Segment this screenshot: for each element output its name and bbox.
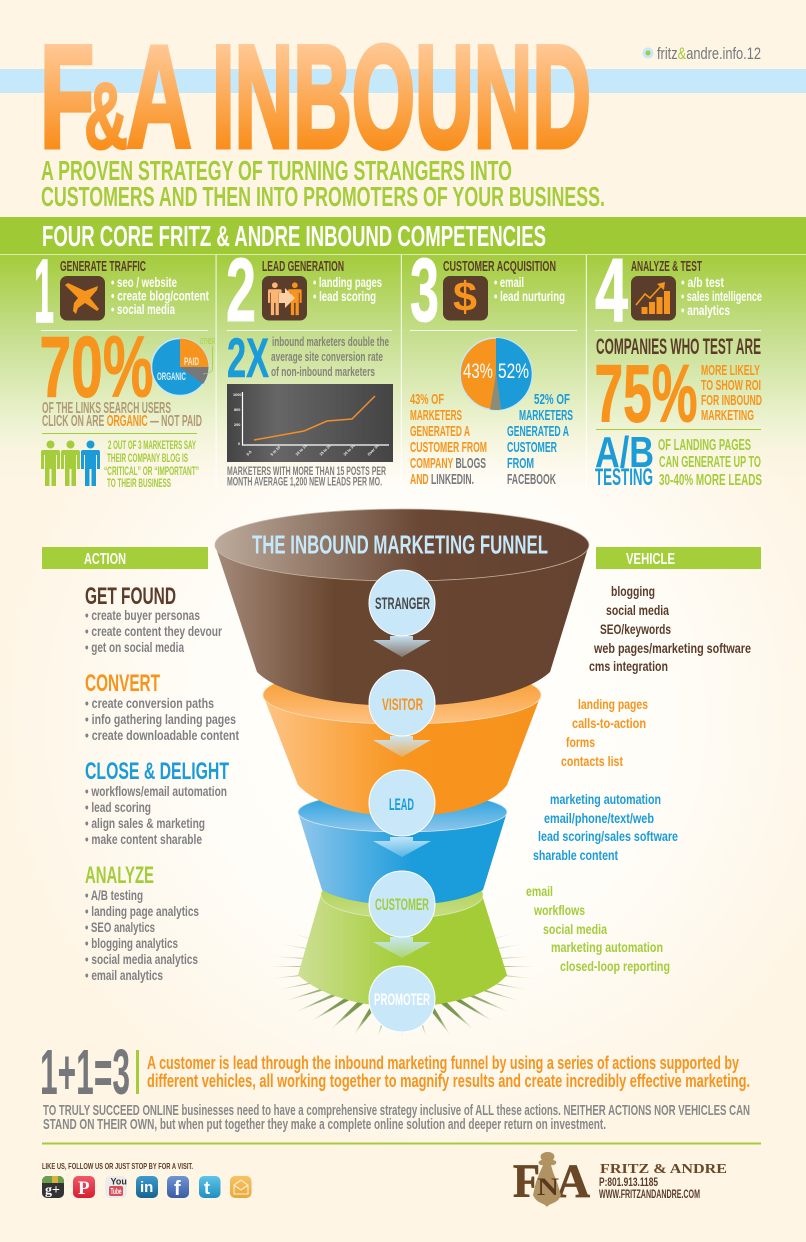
pie chart: PAID xyxy=(184,356,199,368)
action: analyze: • email analytics xyxy=(85,967,163,983)
stat text: FOR INBOUND xyxy=(701,392,762,409)
vehicles: customer: marketing automation xyxy=(551,939,663,955)
contact details: WWW.FRITZANDANDRE.COM xyxy=(599,1189,700,1201)
icon: people xyxy=(41,440,100,486)
stage: lead xyxy=(369,770,435,836)
A/B testing: TESTING xyxy=(595,464,653,491)
action: close and delight: • align sales & marketing xyxy=(85,815,205,831)
line chart xyxy=(227,384,393,462)
text: 43%: 43% OF xyxy=(410,391,444,408)
list: • lead scoring xyxy=(313,288,376,304)
caption: OF THE LINKS SEARCH USERS xyxy=(42,400,171,417)
list: • sales intelligence xyxy=(681,288,762,304)
icon: pinterest xyxy=(73,1176,95,1199)
icon: facebook: f xyxy=(174,1178,181,1200)
list xyxy=(681,274,762,318)
text: 52%: FACEBOOK xyxy=(507,471,556,488)
chart caption: MONTH AVERAGE 1,200 NEW LEADS PER MO. xyxy=(227,476,382,488)
list: • a/b test xyxy=(681,274,724,290)
sunburst behind funnel xyxy=(263,921,541,1040)
action: convert: • create downloadable content xyxy=(85,727,239,743)
icon: mail xyxy=(230,1176,252,1198)
icon: growth chart xyxy=(631,276,676,320)
infographic: 1+1=3 xyxy=(40,1036,130,1108)
number 2: 2 xyxy=(226,241,256,341)
vehicles: stranger: blogging xyxy=(611,583,655,599)
arrow: stranger to visitor xyxy=(373,636,431,657)
contact details: P:801.913.1185 xyxy=(599,1177,658,1189)
blog stat: TO THEIR BUSINESS xyxy=(107,478,171,490)
blog stat: “CRITICAL” OR “IMPORTANT” xyxy=(104,466,199,478)
heading: GENERATE TRAFFIC xyxy=(60,259,146,275)
subtitle xyxy=(41,155,605,212)
logo xyxy=(513,1152,590,1208)
panel: 3 customer acquisition xyxy=(410,241,577,488)
vehicles: stranger: web pages/marketing software xyxy=(593,640,751,656)
contact details xyxy=(599,1162,727,1201)
arrow: visitor to lead xyxy=(373,736,431,757)
logo: N xyxy=(537,1174,559,1201)
subtitle: A PROVEN STRATEGY OF TURNING STRANGERS INTO xyxy=(41,155,512,186)
icon: dollar: $ xyxy=(453,273,477,320)
vehicles: lead: email/phone/text/web xyxy=(544,810,654,826)
caption xyxy=(42,400,202,430)
vehicles: visitor: landing pages xyxy=(578,696,648,712)
list: • landing pages xyxy=(313,274,382,290)
blog stat: THEIR COMPANY BLOG IS xyxy=(107,453,188,465)
A/B testing xyxy=(595,428,654,491)
action: get found xyxy=(85,583,222,655)
icon: pinterest: P xyxy=(78,1178,90,1199)
text: 52%: CUSTOMER xyxy=(507,439,557,456)
panel: 4 analyze and test xyxy=(594,241,762,491)
vehicles: customer xyxy=(526,883,670,974)
vehicles: lead xyxy=(533,791,678,863)
vehicles list xyxy=(526,583,751,974)
vehicles: customer: social media xyxy=(543,921,607,937)
heading: LEAD GENERATION xyxy=(262,259,344,275)
funnel: blue section xyxy=(298,792,507,905)
text: 52%: GENERATED A xyxy=(507,423,569,440)
heading: CUSTOMER ACQUISITION xyxy=(443,259,556,275)
arrow: lead to customer xyxy=(373,837,431,857)
stat text: MORE LIKELY xyxy=(701,362,760,379)
stat 75%: 75% xyxy=(594,348,698,440)
title xyxy=(40,15,591,178)
action: close and delight xyxy=(85,758,229,847)
summary text xyxy=(147,1053,750,1091)
vehicle bar: VEHICLE xyxy=(626,551,675,568)
stat 2X: 2X xyxy=(227,326,269,389)
action: analyze: ANALYZE xyxy=(85,862,154,889)
vehicles: visitor: contacts list xyxy=(561,753,623,769)
list xyxy=(313,274,382,304)
stat text: of non-inbound marketers xyxy=(271,364,375,379)
logo: F xyxy=(513,1155,540,1208)
action: convert: • info gathering landing pages xyxy=(85,711,236,727)
stat text: inbound marketers double the xyxy=(272,334,389,349)
title: & xyxy=(84,64,128,170)
icon: youtube xyxy=(105,1176,127,1198)
panel: 2 lead generation xyxy=(226,241,393,488)
action bar xyxy=(42,547,208,569)
funnel: orange section xyxy=(263,666,541,816)
arrow: customer to promoter xyxy=(373,937,431,958)
icon: twitter: t xyxy=(204,1178,210,1198)
action: convert: • create conversion paths xyxy=(85,695,214,711)
pie chart: OTHER xyxy=(200,337,215,346)
vehicles: lead: lead scoring/sales software xyxy=(538,828,678,844)
icon: google plus: g+ xyxy=(45,1183,60,1198)
stat text xyxy=(701,362,762,424)
stage: customer: CUSTOMER xyxy=(375,895,429,914)
line chart: 5 to 10 xyxy=(270,445,281,457)
contact details: FRITZ & ANDRE xyxy=(600,1162,727,1177)
number 3: 3 xyxy=(410,241,439,341)
vehicles: visitor: forms xyxy=(566,734,595,750)
action: close and delight: • make content sharable xyxy=(85,831,202,847)
line chart: 0 xyxy=(238,442,240,446)
icon: facebook xyxy=(167,1176,189,1200)
text: 43%: CUSTOMER FROM xyxy=(410,439,487,456)
action: analyze: • A/B testing xyxy=(85,887,143,903)
icon: youtube: Tube xyxy=(110,1187,122,1196)
stage: lead: LEAD xyxy=(389,795,414,814)
list xyxy=(494,274,565,304)
pie chart: 52% xyxy=(498,360,529,383)
action: convert: CONVERT xyxy=(85,670,160,697)
vehicles: customer: workflows xyxy=(533,902,585,918)
heading: ANALYZE & TEST xyxy=(631,259,702,275)
icon: dollar xyxy=(443,273,488,320)
stat 70%: 70% xyxy=(40,320,154,416)
icon: youtube: You xyxy=(110,1176,127,1186)
action: analyze: • landing page analytics xyxy=(85,903,199,919)
list xyxy=(111,275,209,317)
text: 43%: COMPANY BLOGS xyxy=(410,455,486,472)
action: get found: GET FOUND xyxy=(85,583,176,610)
text: 52%: FROM xyxy=(507,455,534,472)
action: analyze: • SEO analytics xyxy=(85,919,155,935)
line chart: 200 xyxy=(234,423,240,427)
vehicles: visitor: calls-to-action xyxy=(572,715,646,731)
site tag: fritz&andre.info.12 xyxy=(657,44,761,63)
action: close and delight: CLOSE & DELIGHT xyxy=(85,758,229,785)
stat text: TO SHOW ROI xyxy=(701,377,761,394)
vehicles: stranger: cms integration xyxy=(589,658,668,674)
vehicles: stranger: SEO/keywords xyxy=(600,621,671,637)
stage: visitor: VISITOR xyxy=(382,695,423,714)
blog stat: 2 OUT OF 3 MARKETERS SAY xyxy=(108,440,196,452)
line chart: 20 to 30 xyxy=(343,444,356,457)
stage: customer xyxy=(369,871,435,937)
icon: plane xyxy=(60,276,105,320)
line chart: 10 to 15 xyxy=(295,444,308,457)
social prompt: LIKE US, FOLLOW US OR JUST STOP BY FOR A VISIT. xyxy=(42,1161,193,1171)
vehicles: stranger xyxy=(589,583,751,674)
panel: 1 generate traffic xyxy=(34,242,215,490)
caption: CLICK ON ARE ORGANIC — NOT PAID xyxy=(42,413,202,430)
list: • email xyxy=(494,274,524,290)
stage: stranger: STRANGER xyxy=(375,594,430,613)
action: close and delight: • lead scoring xyxy=(85,799,151,815)
panel: competencies background xyxy=(0,254,806,490)
A/B testing: A/B xyxy=(595,428,654,477)
text: 52%: 52% OF xyxy=(534,391,570,408)
title: A xyxy=(126,15,192,178)
body text xyxy=(43,1102,750,1133)
funnel xyxy=(215,509,589,1032)
icon: google plus xyxy=(42,1176,64,1198)
action: get found: • create content they devour xyxy=(85,623,222,639)
text: 43% xyxy=(410,391,487,488)
funnel: brown section xyxy=(215,509,589,706)
vehicles: lead: marketing automation xyxy=(550,791,661,807)
list: • seo / website xyxy=(111,275,177,290)
action bar: ACTION xyxy=(84,551,126,568)
number 4: 4 xyxy=(595,241,628,341)
vehicles: customer: closed-loop reporting xyxy=(560,958,670,974)
social icons xyxy=(42,1176,252,1200)
line chart: 1000 xyxy=(233,393,241,397)
action: convert xyxy=(85,670,239,743)
A/B text xyxy=(658,437,762,489)
text: 43%: GENERATED A xyxy=(410,423,470,440)
light blue stripe xyxy=(0,69,806,93)
action: analyze: • social media analytics xyxy=(85,951,198,967)
chart caption: MARKETERS WITH MORE THAN 15 POSTS PER xyxy=(227,466,386,478)
vehicles: lead: sharable content xyxy=(533,847,618,863)
pie chart: ORGANIC xyxy=(157,371,186,383)
panel: 1 generate traffic: 1 xyxy=(34,242,54,342)
action: close and delight: • workflows/email automation xyxy=(85,783,227,799)
funnel title: THE INBOUND MARKETING FUNNEL xyxy=(252,530,548,560)
title: F xyxy=(40,15,94,178)
icon: linkedin: in xyxy=(140,1179,153,1196)
actions list xyxy=(85,583,239,983)
text: 43%: AND LINKEDIN. xyxy=(410,471,474,488)
text: 52%: MARKETERS xyxy=(519,407,573,424)
pie chart xyxy=(460,338,532,410)
stage: stranger xyxy=(369,570,435,636)
icon: twitter xyxy=(199,1176,220,1198)
pie chart xyxy=(152,337,215,396)
action: get found: • create buyer personas xyxy=(85,607,200,623)
heading band: FOUR CORE FRITZ & ANDRE INBOUND COMPETENCIES xyxy=(42,221,546,253)
text: 52% xyxy=(507,391,573,488)
blog stat xyxy=(104,440,199,490)
text: 43%: MARKETERS xyxy=(410,407,462,424)
action: analyze xyxy=(85,862,199,983)
list: • create blog/content xyxy=(111,288,209,304)
divider bar xyxy=(136,1050,139,1094)
chart caption xyxy=(227,466,386,488)
list: • lead nurturing xyxy=(494,288,565,304)
stage: promoter xyxy=(369,966,435,1032)
stage: visitor xyxy=(369,670,435,736)
stat text: MARKETING xyxy=(701,407,754,424)
stat text xyxy=(271,334,389,379)
vehicles: customer: email xyxy=(526,883,553,899)
action: analyze: • blogging analytics xyxy=(85,935,178,951)
funnel: green section xyxy=(298,872,507,1007)
line chart: Over 30 xyxy=(367,444,380,457)
vehicles: visitor xyxy=(561,696,648,769)
line chart: 0-5 xyxy=(246,450,253,457)
stage: promoter: PROMOTER xyxy=(374,990,430,1009)
icon: linkedin xyxy=(136,1176,158,1198)
vehicle bar xyxy=(596,547,761,569)
line chart: 15 to 20 xyxy=(319,444,332,457)
list: • analytics xyxy=(681,302,730,318)
list: • social media xyxy=(111,302,175,317)
icon: people arrow xyxy=(262,276,307,320)
line chart: 800 xyxy=(234,408,240,412)
action: get found: • get on social media xyxy=(85,639,184,655)
stat text: average site conversion rate xyxy=(271,349,383,364)
pie chart: 43% xyxy=(463,360,493,383)
vehicles: stranger: social media xyxy=(606,602,669,618)
logo: A xyxy=(556,1155,590,1208)
